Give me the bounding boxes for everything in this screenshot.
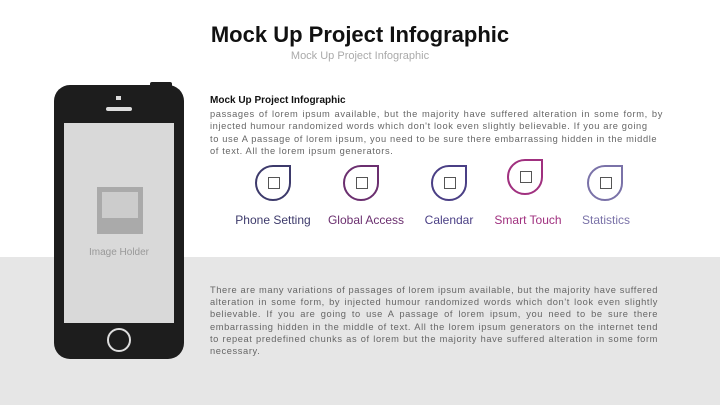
icon: phone setting [255, 165, 291, 201]
intro text block: to use A passage of lorem ipsum, you need to be sure there embarrassing hidden in the middle [210, 134, 657, 144]
label: smart touch: Smart Touch [494, 213, 562, 227]
icon: smart touch [507, 159, 543, 195]
label: statistics: Statistics [582, 213, 630, 227]
intro text block [210, 95, 663, 156]
features row [235, 159, 630, 227]
phone [54, 82, 184, 359]
subtitle: Mock Up Project Infographic [291, 50, 429, 62]
image holder text: Image Holder [89, 247, 149, 258]
icon: global access [343, 165, 379, 201]
label: global access: Global Access [328, 213, 404, 227]
background band [0, 257, 720, 405]
home button [107, 328, 131, 352]
intro text block: Mock Up Project Infographic [210, 95, 346, 106]
label: calendar: Calendar [425, 213, 473, 227]
label: phone setting: Phone Setting [235, 213, 311, 227]
intro text block: of text. All the lorem ipsum generators. [210, 146, 393, 156]
title: Mock Up Project Infographic [211, 22, 509, 47]
icon: calendar [431, 165, 467, 201]
screen [64, 123, 174, 323]
icon: statistics [587, 165, 623, 201]
intro text block: passages of lorem ipsum available, but the majority have suffered alteration in some form, by injected humour randomized words which don't look even slightly believable. If you are going [210, 108, 663, 131]
icon: image placeholder [97, 187, 143, 234]
bottom text block: There are many variations of passages of lorem ipsum available, but the majority have suffered alteration in some form, by injected humour randomized words which don't look even slightly believable. If you are going to use A passage of lorem ipsum, you need to be sure there embarrassing hidden in the middle of text. All the lorem ipsum generators on the internet tend to repeat predefined chunks as of lorem but the majority have suffered alteration in some form necessary. [210, 285, 658, 356]
